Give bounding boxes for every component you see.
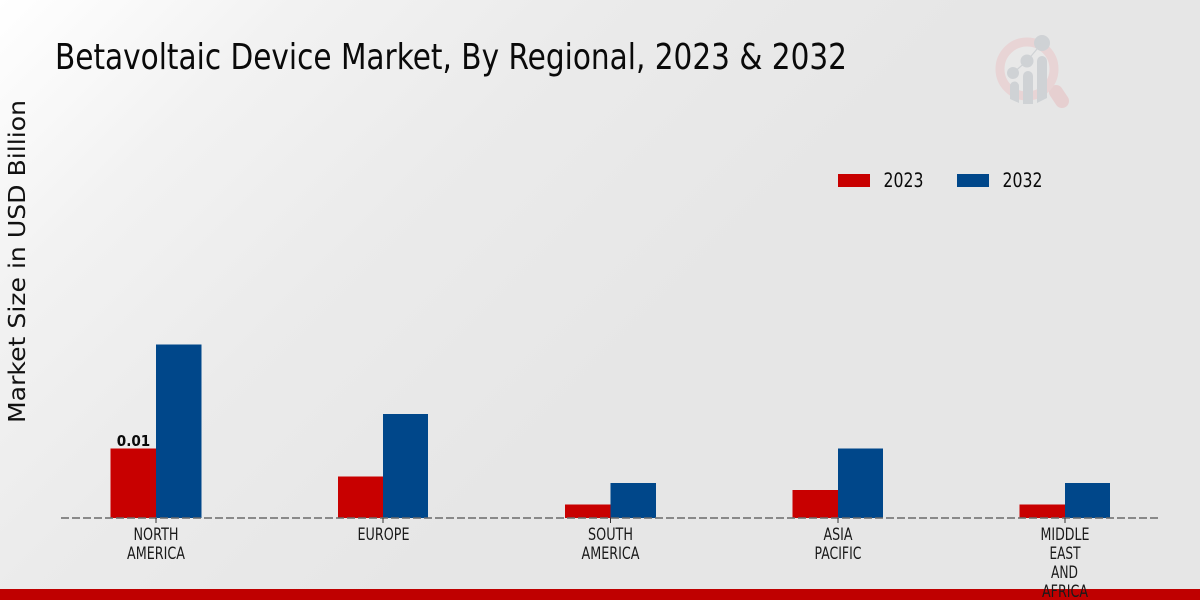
x-axis ticks (156, 518, 1065, 523)
title: Betavoltaic Device Market, By Regional, 2023 & 2032 (55, 37, 847, 78)
bar chart (61, 344, 1159, 563)
bars: Middle East and Africa (1020, 483, 1110, 518)
icon: chart bars and dots (1007, 35, 1050, 104)
footer bar (0, 589, 1200, 600)
icon: magnifier handle (1056, 92, 1062, 101)
category label: South America: SOUTH (588, 525, 633, 544)
legend item: 2023: 2023 (884, 169, 924, 192)
category label: South America: AMERICA (582, 544, 640, 563)
y-axis label: Market Size in USD Billion (5, 100, 31, 423)
category label: Middle East and Africa (1040, 525, 1090, 600)
category label: Europe: EUROPE (358, 525, 410, 544)
legend item: 2032: 2032 (1002, 169, 1042, 192)
category label: North America: AMERICA (127, 544, 186, 563)
category label: South America (582, 525, 640, 563)
category label: Asia Pacific (814, 525, 862, 563)
legend (838, 169, 1042, 192)
category label: Asia Pacific: PACIFIC (814, 544, 862, 563)
category label: North America: NORTH (134, 525, 178, 544)
legend item: 2032 (957, 169, 1042, 192)
data label: 0.01: 0.01 (117, 432, 150, 450)
category label: Middle East and Africa: EAST (1050, 544, 1081, 563)
bars: South America (565, 483, 656, 518)
bars: Europe (338, 414, 428, 518)
category label: North America (127, 525, 186, 563)
category label: Asia Pacific: ASIA (824, 525, 853, 544)
x-axis baseline (61, 517, 1159, 519)
bars: Asia Pacific (792, 448, 883, 518)
legend item: 2023 (838, 169, 924, 192)
bars: North America (110, 344, 202, 518)
icon: watermark logo (1000, 35, 1062, 104)
category label: Middle East and Africa: AND (1051, 563, 1078, 582)
category label: Middle East and Africa: MIDDLE (1040, 525, 1090, 544)
icon: magnifier ring (1000, 42, 1054, 96)
